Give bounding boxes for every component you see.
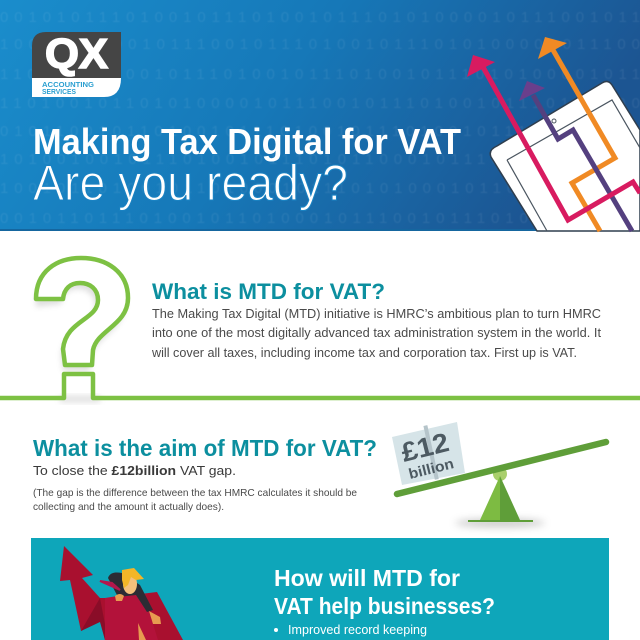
note text [33, 487, 357, 513]
panel: how will MTD help businesses [31, 538, 609, 640]
icon: seesaw with £12 billion [392, 422, 606, 527]
section: what is MTD [0, 258, 640, 403]
binary pattern: 1010010010111010010111010110001011100101110100 [0, 151, 640, 168]
panel heading [274, 565, 495, 619]
header banner [0, 0, 640, 231]
money note [392, 422, 465, 485]
heading: What is MTD for VAT? [152, 279, 385, 304]
arrow: purple [519, 81, 632, 231]
binary pattern: 0101100101101001011101001011101001011101010000 [0, 123, 640, 140]
logo [32, 30, 121, 97]
binary pattern: 0010101110100101110100101110101000010111001011 [0, 9, 640, 26]
bullet list: Improved record keeping [288, 622, 427, 637]
binary pattern: 1101001011010100001011100101110100101110101000 [0, 95, 640, 112]
arrow: orange [538, 37, 615, 231]
illustration: businessman climbing red arrow [60, 546, 183, 640]
logo: QX [45, 30, 108, 77]
section: aim of MTD [33, 422, 606, 527]
body text: The Making Tax Digital (MTD) initiative is HMRC’s ambitious plan to turn HMRC [152, 306, 601, 321]
binary pattern: 1001010000101110010111010010111010100001011100 [0, 36, 640, 53]
logo: ACCOUNTING [42, 80, 94, 89]
subtitle: Are you ready? [33, 155, 348, 211]
body text [151, 306, 601, 360]
binary pattern: 1001011010010110100010111010100010110111011010 [0, 180, 640, 197]
note text: (The gap is the difference between the tax HMRC calculates it should be [33, 487, 357, 499]
icon: tablet with arrows [467, 37, 640, 231]
body text: will cover all taxes, including income tax and corporation tax. First up is VAT. [151, 345, 577, 360]
money note: billion [407, 456, 456, 483]
binary pattern [0, 9, 640, 227]
binary pattern: 1101011010010111010010111010010111010100001011 [0, 66, 640, 83]
logo: SERVICES [42, 87, 76, 96]
arrow: pink [467, 55, 640, 220]
money note: £12 [398, 427, 452, 468]
note text: collecting and the amount it actually does). [33, 501, 224, 513]
aim text: To close the £12billion VAT gap. [33, 464, 236, 478]
icon: question mark [0, 258, 640, 403]
panel heading: VAT help businesses? [274, 593, 495, 619]
panel heading: How will MTD for [274, 565, 460, 591]
binary pattern: 0010110111010010110100010111001011101000101110 [0, 210, 640, 227]
heading: What is the aim of MTD for VAT? [33, 435, 377, 461]
body text: into one of the most digitally advanced tax administration system in the world. It [152, 325, 601, 340]
title: Making Tax Digital for VAT [33, 121, 461, 162]
